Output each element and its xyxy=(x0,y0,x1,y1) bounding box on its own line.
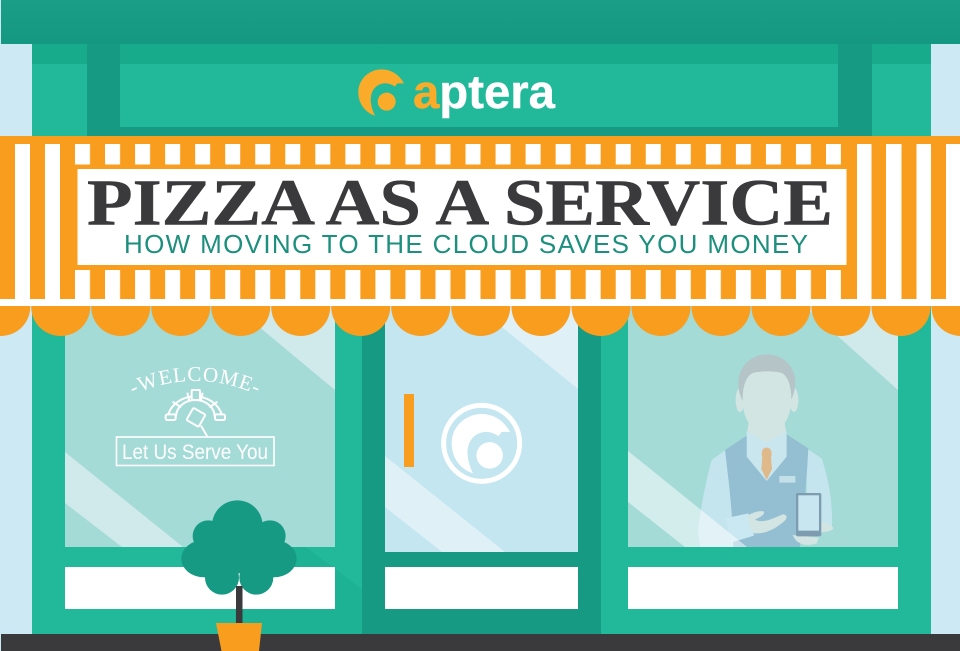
roof band xyxy=(1,0,960,44)
icon: aptera mark xyxy=(358,69,404,116)
logo wordmark: aptera xyxy=(413,65,556,118)
waiter figure xyxy=(628,354,833,547)
left window xyxy=(65,306,335,609)
potted tree xyxy=(181,500,297,651)
collar xyxy=(747,431,787,482)
tie xyxy=(761,448,772,480)
door xyxy=(362,306,601,634)
sign posts xyxy=(87,44,872,136)
let us serve you sign: Let Us Serve You xyxy=(122,441,268,464)
awning body xyxy=(0,136,960,299)
pot xyxy=(216,623,262,651)
sign board xyxy=(87,44,872,136)
welcome text: -WELCOME- xyxy=(132,367,258,391)
right window xyxy=(628,306,898,609)
scallops xyxy=(0,306,960,336)
window light stripe xyxy=(628,451,747,547)
ground xyxy=(1,634,960,651)
white stripes xyxy=(0,144,960,306)
trunk xyxy=(236,586,242,626)
other hand xyxy=(793,522,833,545)
shirt xyxy=(698,449,737,547)
awning xyxy=(0,136,960,336)
title: PIZZA AS A SERVICE xyxy=(87,166,833,240)
cuff xyxy=(732,514,754,542)
icon: door logo xyxy=(444,405,520,481)
hand xyxy=(747,511,787,533)
window decal: welcome xyxy=(116,367,275,466)
vest xyxy=(725,434,808,547)
ears and neck xyxy=(736,388,744,412)
subtitle: HOW MOVING TO THE CLOUD SAVES YOU MONEY xyxy=(124,229,808,259)
door handle xyxy=(404,394,414,467)
face xyxy=(742,371,792,423)
name tag xyxy=(779,476,795,483)
aptera logo xyxy=(358,65,556,118)
title banner xyxy=(78,166,846,265)
hair xyxy=(738,354,795,401)
foliage xyxy=(181,500,297,595)
phone xyxy=(796,493,821,536)
icon: pizza oven and peel xyxy=(166,390,225,437)
